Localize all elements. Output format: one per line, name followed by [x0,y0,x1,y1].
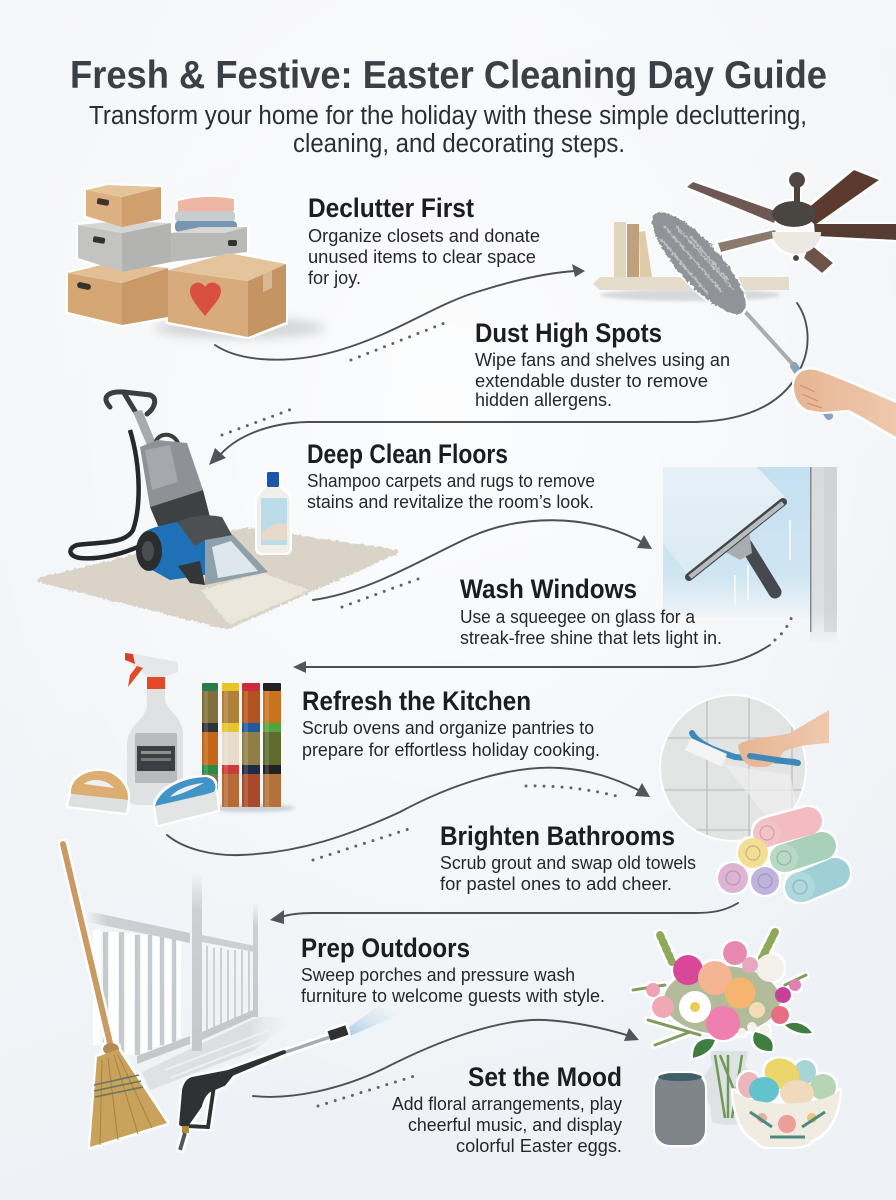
body text [475,350,730,410]
arrow: windows to kitchen [293,614,793,673]
folded clothes [175,197,237,232]
heading: Wash Windows [460,574,637,604]
body text: Shampoo carpets and rugs to remove [307,471,595,491]
body text: for joy. [308,268,361,288]
body text: hidden allergens. [475,390,612,410]
arrow: dust to floors [209,303,808,465]
illustration: rolled pastel towels [718,819,835,902]
heading: Declutter First [308,193,474,223]
body text: Wipe fans and shelves using an [475,350,730,370]
body text [307,471,595,512]
body text: Organize closets and donate [308,226,540,246]
arrow: bathrooms to outdoors [270,903,738,924]
body text [308,226,540,288]
illustration: shelf with books [593,222,789,301]
step 7: prep outdoors [63,844,605,1150]
illustration: broom [63,844,167,1147]
illustration: porch railing [87,873,295,1090]
step 6: brighten bathrooms [440,690,835,902]
illustration: blue scrub brush [155,777,218,825]
illustration: extendable duster [636,197,829,416]
body text: prepare for effortless holiday cooking. [302,740,600,760]
title: Fresh & Festive: Easter Cleaning Day Guide [70,54,827,97]
step 4: wash windows [460,467,837,648]
illustration: tan scrub brush [68,771,128,813]
illustration: spray bottle with oven [125,653,183,805]
heart box [168,253,286,337]
body text [302,718,600,760]
body text: Sweep porches and pressure wash [301,965,575,985]
illustration: rug [40,530,395,627]
illustration: smart speaker [655,1073,705,1145]
body text [301,965,605,1006]
bottom box [122,268,168,325]
illustration: window with squeegee [663,467,837,642]
body text: for pastel ones to add cheer. [440,874,672,894]
body text: colorful Easter eggs. [456,1136,622,1156]
body text: streak-free shine that lets light in. [460,628,722,648]
illustration: tile circle with brush [655,690,829,850]
heading: Set the Mood [468,1062,622,1092]
subtitle: Transform your home for the holiday with these simple decluttering, [89,102,807,130]
top box [122,187,161,227]
body text: unused items to clear space [308,247,536,267]
heading: Dust High Spots [475,318,662,348]
step 2: dust high spots [475,170,896,437]
subtitle: cleaning, and decorating steps. [293,130,625,158]
illustration: bouquet [633,932,812,1058]
step 3: deep clean floors [40,392,595,627]
body text: Scrub grout and swap old towels [440,853,696,873]
heading: Refresh the Kitchen [302,686,531,716]
body text: Use a squeegee on glass for a [460,607,696,627]
arrow: kitchen to bathrooms [167,768,650,860]
illustration: ceiling fan [687,170,896,273]
step 5: refresh the kitchen [68,653,600,825]
illustration: hand holding duster [794,370,896,437]
heading: Brighten Bathrooms [440,821,675,851]
arrow: floors to windows [313,520,652,607]
arrow: declutter to dust [215,264,585,360]
body text: extendable duster to remove [475,371,708,391]
illustration: stacked boxes and folded clothes [68,185,325,339]
body text [440,853,696,894]
illustration: carpet cleaner [70,392,268,585]
arrow: outdoors to mood [253,1020,639,1106]
subtitle [89,102,807,158]
middle box [122,223,171,272]
body text [460,607,722,648]
step 8: set the mood [392,932,840,1156]
illustration: vase with stems [703,1051,753,1125]
illustration: pressure washer [180,1005,396,1150]
heading: Prep Outdoors [301,933,470,963]
illustration: bowl of Easter eggs [733,1053,840,1147]
body text: furniture to welcome guests with style. [301,986,605,1006]
body text [392,1094,623,1156]
squeegee [689,502,783,592]
body text: Scrub ovens and organize pantries to [302,718,594,738]
heading: Deep Clean Floors [307,439,508,469]
illustration: spice jars [202,683,295,812]
step 1: declutter first [68,185,540,339]
body text: stains and revitalize the room’s look. [307,492,594,512]
illustration: shampoo bottle [257,472,290,553]
body text: Add floral arrangements, play [392,1094,623,1114]
body text: cheerful music, and display [408,1115,623,1135]
